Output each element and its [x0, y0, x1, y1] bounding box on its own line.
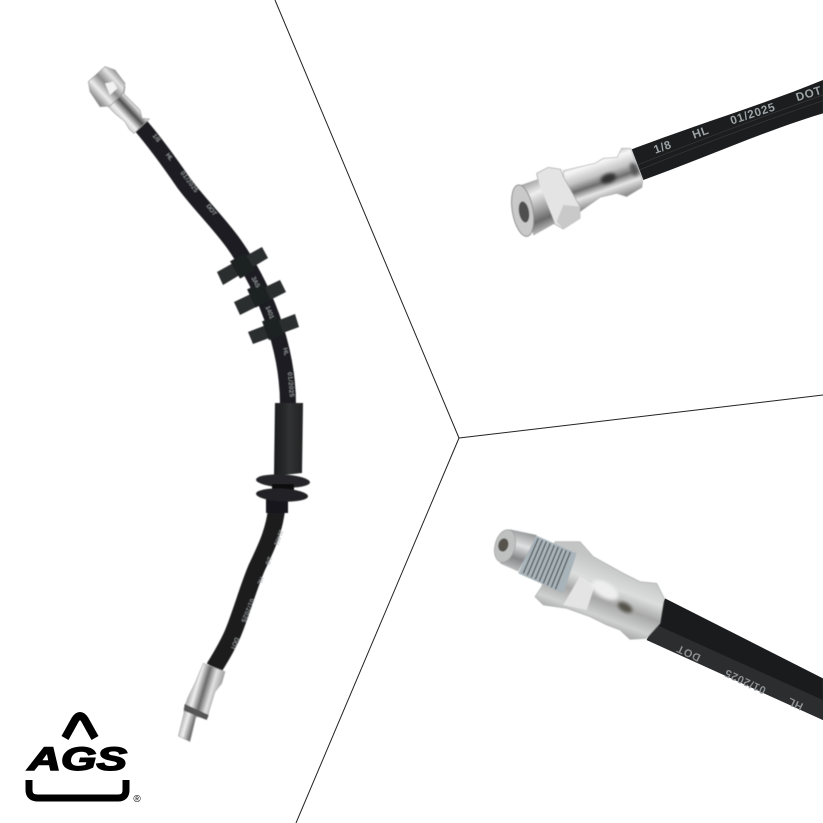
close-up hose body: [647, 598, 823, 720]
hex nut: [537, 167, 580, 229]
hose markings: HL: [281, 347, 289, 357]
top hex face: [105, 82, 117, 95]
full brake hose: [88, 67, 310, 742]
rubber grommets: [256, 473, 310, 513]
hose markings: [151, 133, 294, 651]
bottom fitting hex band: [184, 704, 209, 720]
hose printed text: [675, 642, 805, 712]
hose markings: 01/2025: [239, 598, 254, 623]
registered mark: ®: [133, 794, 141, 805]
body highlight: [588, 576, 622, 604]
hose markings: 1/8: [151, 133, 161, 144]
hose markings: 3AS: [250, 276, 260, 289]
hose printed text: HL: [691, 124, 711, 142]
ferrule groove shadow: [599, 171, 617, 185]
rubber sleeve: [274, 403, 303, 476]
hose markings: J1401: [272, 529, 284, 547]
hose markings: 1/8: [263, 555, 272, 566]
bottom fitting body: [178, 663, 225, 742]
upper hose section: [141, 126, 288, 405]
top hex nut and tip: [88, 67, 125, 107]
fitting nose: [500, 529, 537, 572]
logo bottom bracket: [29, 780, 126, 798]
divider lines: [275, 0, 823, 823]
hose markings: HL: [255, 576, 264, 586]
hose lighter band: [647, 625, 823, 720]
top ferrule: [108, 82, 149, 133]
fitting end face: [508, 183, 537, 238]
close-up: male threaded end: [491, 527, 823, 720]
hose markings: 01/2025: [179, 171, 199, 194]
hose clip tabs: [217, 247, 299, 344]
hose markings: 01/2025: [286, 372, 294, 398]
hose markings: 1401: [264, 305, 274, 321]
fitting bore: [497, 537, 510, 553]
logo wordmark: AGS: [27, 741, 128, 777]
metal fitting: [491, 527, 664, 639]
lower hose section: [214, 505, 277, 668]
hose printed text: 01/2025: [723, 666, 768, 696]
hose markings: DOT: [205, 204, 217, 218]
hose printed text: DOT: [794, 84, 823, 104]
fitting collar: [520, 179, 555, 236]
top metal fitting: [88, 67, 149, 133]
hose printed text: HL: [786, 695, 805, 712]
metal fitting: [508, 148, 643, 238]
fitting end face: [491, 527, 519, 565]
threaded section: [518, 535, 577, 593]
hex face: [563, 576, 595, 610]
hose markings: DOT: [229, 636, 239, 651]
hex shaded facet: [557, 205, 580, 229]
hose printed text: [652, 84, 823, 157]
AGS logo: [27, 716, 141, 805]
crimped body: [535, 542, 664, 639]
hose clip centres: [230, 253, 284, 340]
fitting bore: [517, 201, 531, 223]
ferrule flange shadow: [629, 162, 639, 177]
hose printed text: DOT: [675, 642, 703, 663]
hose ribs: [637, 95, 823, 170]
logo top chevron: [65, 716, 95, 738]
hose markings: HL: [164, 153, 174, 163]
hose printed text: 01/2025: [729, 101, 777, 127]
hose printed text: 1/8: [652, 138, 674, 157]
close-up hose body: [632, 80, 823, 180]
bottom metal fitting: [178, 663, 225, 742]
crimped ferrule: [563, 148, 643, 213]
close-up: female fitting end: [508, 80, 823, 238]
body shadow: [616, 600, 634, 615]
